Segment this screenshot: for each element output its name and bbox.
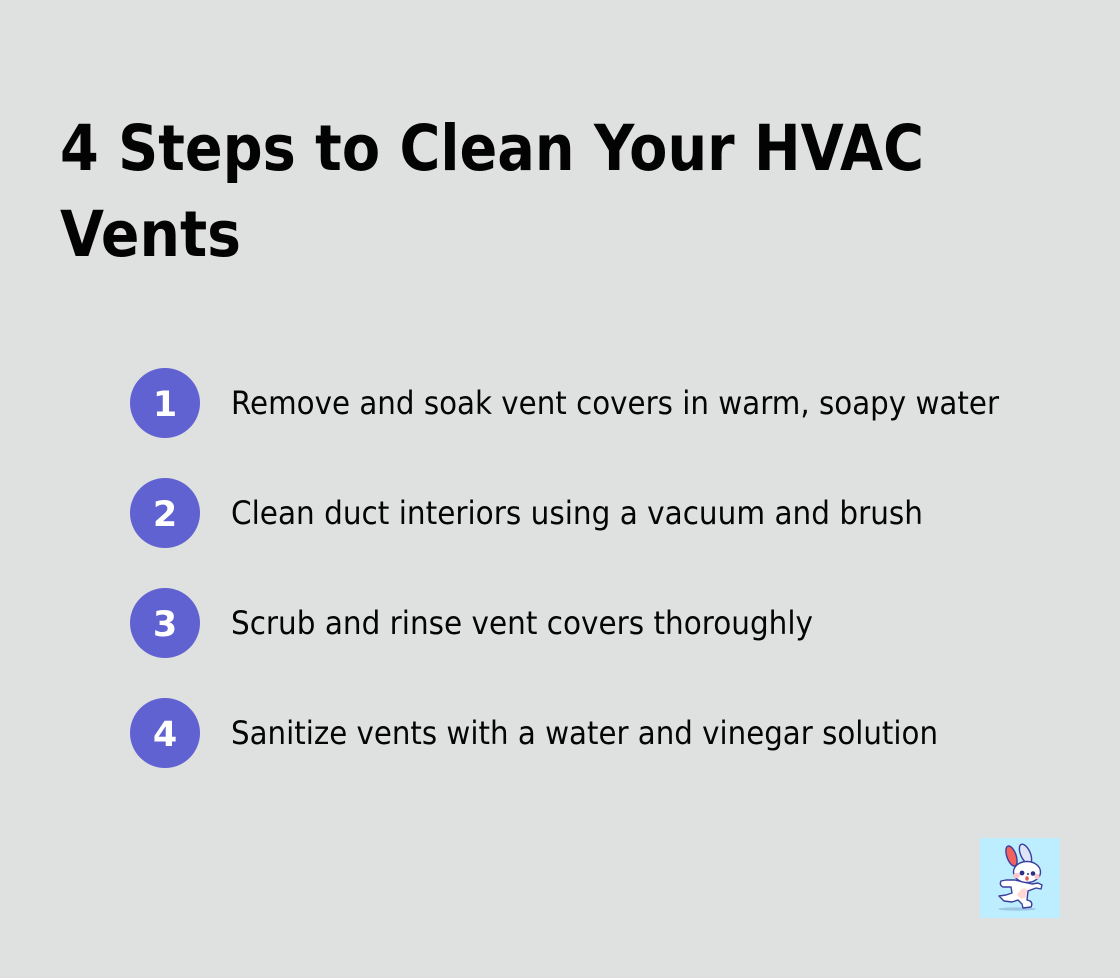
- step 2 number: 2: [153, 495, 177, 535]
- step 4 text: Sanitize vents with a water and vinegar solution: [231, 714, 938, 752]
- icon: running rabbit logo: [980, 838, 1060, 918]
- step 2: [130, 478, 923, 548]
- step 1: [130, 368, 1000, 438]
- step 2 badge: [130, 478, 200, 548]
- step 2 text: Clean duct interiors using a vacuum and brush: [231, 494, 923, 532]
- step 1 badge: [130, 368, 200, 438]
- step 4: [130, 698, 938, 768]
- step 4 badge: [130, 698, 200, 768]
- step 3 number: 3: [153, 605, 177, 645]
- step 3: [130, 588, 813, 658]
- step 1 number: 1: [153, 385, 177, 425]
- step 4 number: 4: [153, 715, 177, 755]
- step 3 badge: [130, 588, 200, 658]
- title: Vents: [60, 198, 241, 271]
- title: [60, 112, 924, 271]
- title: 4 Steps to Clean Your HVAC: [60, 112, 924, 185]
- step 3 text: Scrub and rinse vent covers thoroughly: [231, 604, 813, 642]
- step 1 text: Remove and soak vent covers in warm, soapy water: [231, 384, 1000, 422]
